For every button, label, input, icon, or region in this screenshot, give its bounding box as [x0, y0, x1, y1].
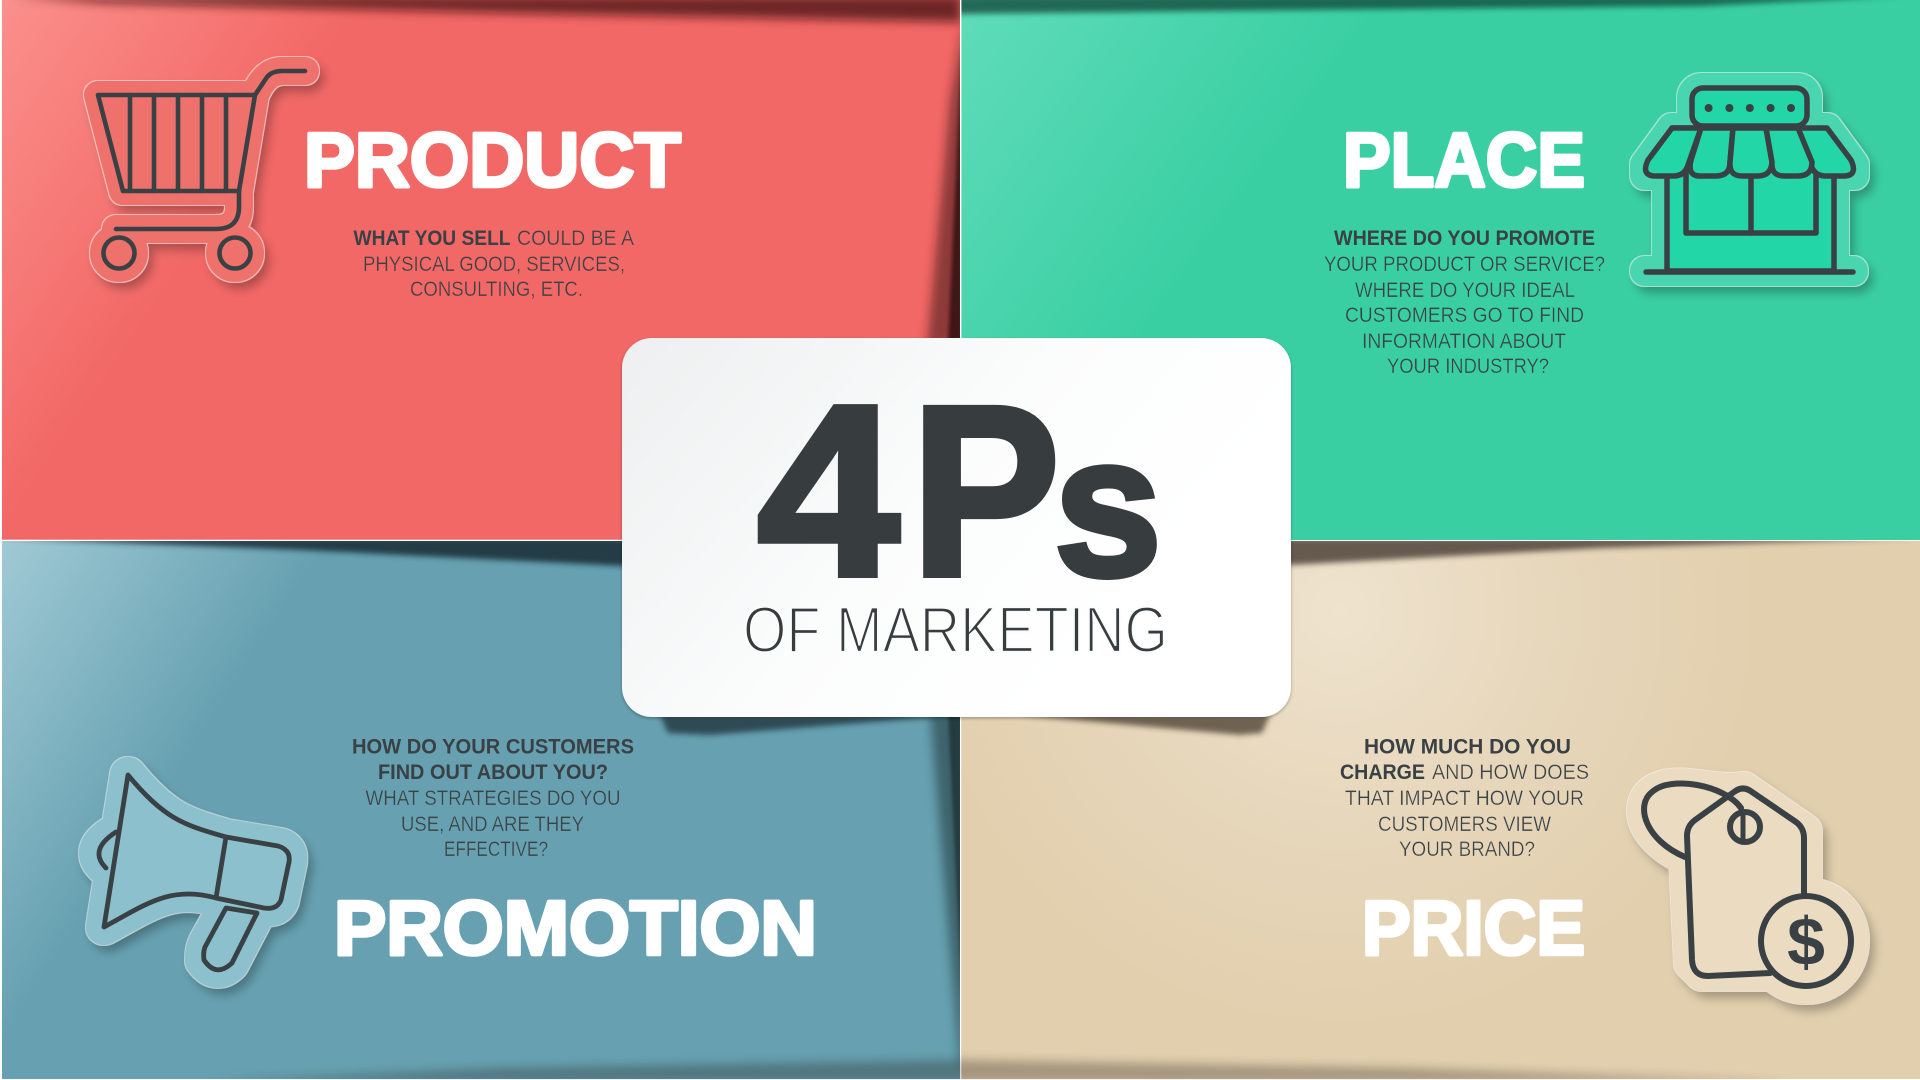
text: price description: CUSTOMERS VIEW [1378, 813, 1551, 836]
heading: promotion: PROMOTION [334, 886, 817, 972]
icon: shopping cart [98, 71, 305, 268]
text: place description: WHERE DO YOUR IDEAL [1355, 279, 1575, 302]
icon: megaphone [97, 775, 289, 970]
text: price description [1340, 736, 1589, 861]
heading: place: PLACE [1343, 118, 1585, 204]
icon: storefront [1645, 88, 1854, 272]
panel: promotion background [2, 538, 965, 1079]
text: place description [1324, 227, 1605, 378]
text: place description: YOUR PRODUCT OR SERVICE? [1324, 253, 1605, 276]
text: place description: WHERE DO YOU PROMOTE [1334, 227, 1595, 250]
text: promotion description: EFFECTIVE? [444, 838, 548, 861]
text: promotion description: FIND OUT ABOUT YOU? [378, 761, 608, 784]
text: promotion description: HOW DO YOUR CUSTOMERS [352, 736, 634, 758]
text: price description: CHARGE [1340, 761, 1425, 784]
heading: price: PRICE [1362, 886, 1585, 972]
text: price description: YOUR BRAND? [1399, 838, 1535, 861]
panel: center title card [622, 338, 1291, 717]
title: 4Ps: 4 [757, 356, 899, 628]
text: product description: PHYSICAL GOOD, SERVICES, [363, 253, 625, 276]
text: place description: YOUR INDUSTRY? [1387, 355, 1549, 378]
icon: price tag with dollar coin [1644, 783, 1851, 986]
title: 4Ps: s [1054, 394, 1162, 618]
text: promotion description: USE, AND ARE THEY [401, 813, 584, 836]
title: 4Ps [757, 356, 1162, 628]
text: price description: THAT IMPACT HOW YOUR [1345, 787, 1584, 810]
text: product description: COULD BE A [517, 227, 634, 250]
heading: product: PRODUCT [304, 118, 681, 204]
panel: price background [955, 538, 1920, 1079]
text: place description: CUSTOMERS GO TO FIND [1345, 304, 1584, 327]
text: product description [354, 227, 634, 301]
text: price description: HOW MUCH DO YOU [1364, 736, 1571, 758]
title: 4Ps: P [911, 356, 1060, 627]
text: promotion description [352, 736, 634, 861]
card shadow [660, 715, 1270, 735]
panel: place background [955, 0, 1920, 540]
text: promotion description: WHAT STRATEGIES DO YOU [366, 787, 620, 810]
text: price description: AND HOW DOES [1432, 761, 1589, 784]
subtitle: of marketing: OF MARKETING [743, 593, 1168, 666]
text: product description: WHAT YOU SELL [354, 227, 511, 250]
panel: product background [2, 0, 965, 540]
text: place description: INFORMATION ABOUT [1362, 330, 1566, 353]
icon glyph: dollar sign: $ [1787, 904, 1825, 980]
text: product description: CONSULTING, ETC. [410, 278, 583, 301]
panel bottom shade [200, 1060, 1800, 1080]
